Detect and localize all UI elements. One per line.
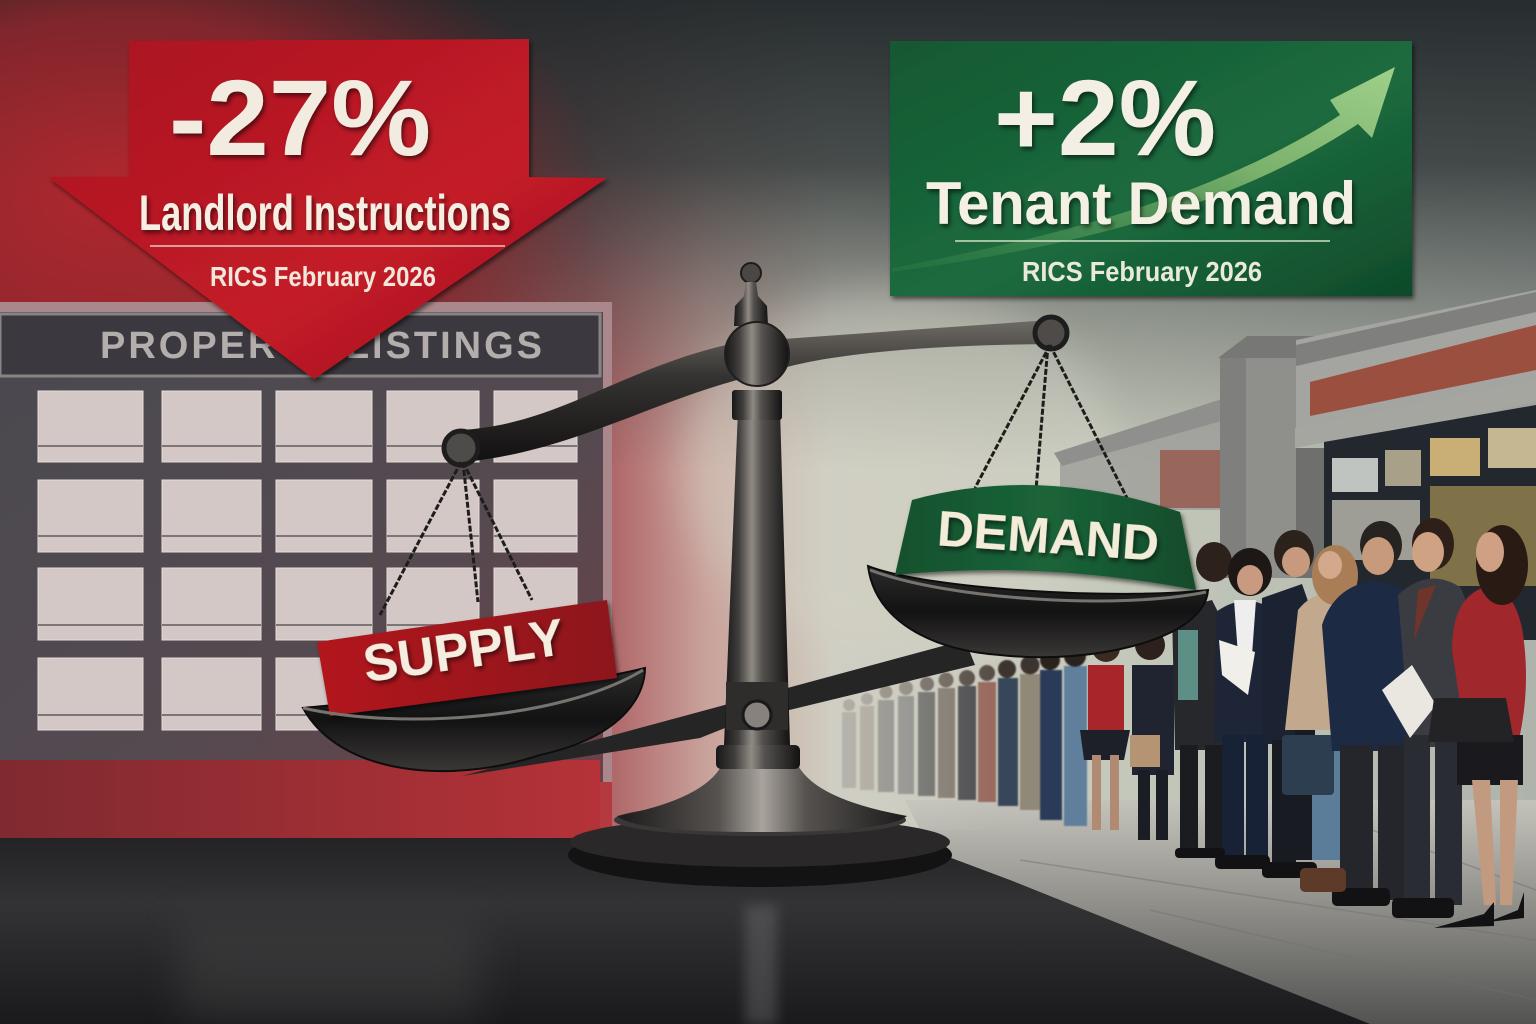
finial: [734, 263, 768, 326]
person: [1172, 542, 1232, 850]
figure: -27%: -27%: [169, 57, 431, 178]
panel: +2% tenant demand: [890, 41, 1412, 296]
label: landlord instructions: Landlord Instructions: [139, 185, 511, 241]
demand tag: [895, 485, 1196, 590]
column: [724, 410, 790, 745]
lower beam: [462, 640, 975, 776]
queue of tenants: foreground: [1080, 518, 1528, 928]
listing cards: [38, 391, 577, 730]
demand tag: DEMAND: [936, 500, 1161, 572]
person: [1382, 518, 1474, 905]
person: [1428, 525, 1528, 905]
callout: -27% landlord instructions: [48, 39, 607, 379]
person: [1214, 548, 1280, 860]
pivot: [725, 322, 789, 386]
person: [1262, 530, 1316, 865]
person: [1282, 545, 1358, 860]
figure: +2%: +2%: [994, 57, 1216, 178]
base: [568, 758, 952, 887]
shoes: [1175, 848, 1524, 928]
source: RICS February 2026: RICS February 2026: [210, 261, 436, 292]
icon: rising arrow: [892, 67, 1395, 272]
left pivot: [444, 431, 478, 465]
right pivot: [1035, 317, 1067, 349]
chains: right: [975, 345, 1128, 500]
queue of tenants: distant crowd: [842, 645, 1087, 826]
chains: left: [380, 462, 532, 615]
supply tag: SUPPLY: [360, 608, 568, 694]
person: [1130, 630, 1174, 840]
right pan: [868, 485, 1208, 657]
balance scale: [303, 263, 1208, 887]
source: RICS February 2026: RICS February 2026: [1022, 256, 1262, 287]
crowd fade: [830, 640, 1000, 830]
label: tenant demand: Tenant Demand: [926, 170, 1356, 237]
person: [1080, 634, 1130, 830]
panel: property listings board: [0, 302, 612, 838]
building: [1054, 290, 1536, 640]
heading: property listings: PROPERTY LISTINGS: [100, 325, 542, 367]
floor: [0, 800, 1536, 1024]
person: [1322, 521, 1427, 900]
beam: [460, 320, 1052, 462]
supply tag: [317, 600, 617, 716]
left pan: [303, 600, 645, 771]
